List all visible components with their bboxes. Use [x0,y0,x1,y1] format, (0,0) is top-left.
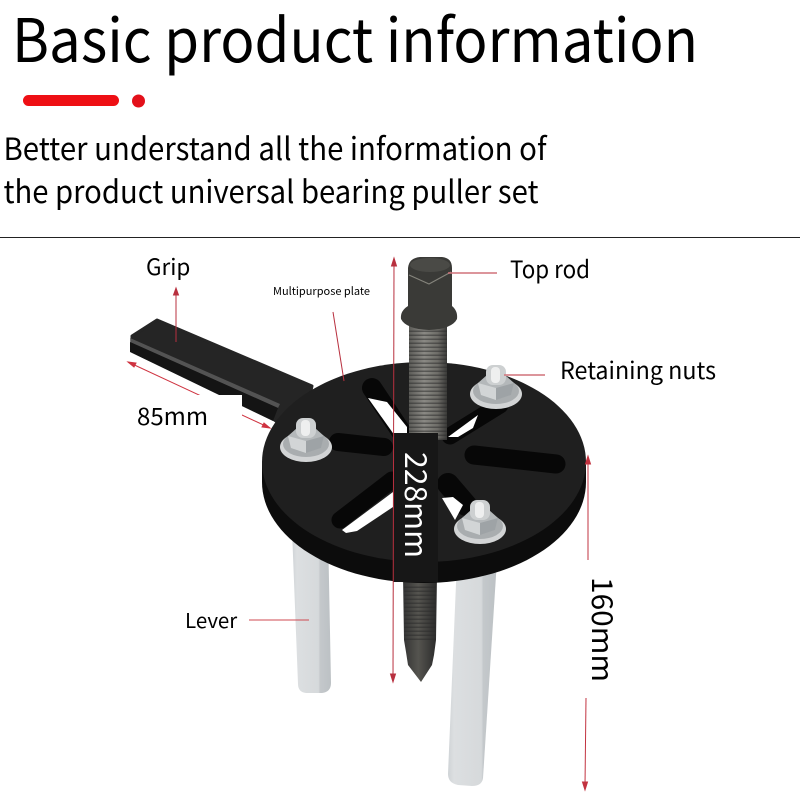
leader: retaining nuts [504,374,545,376]
label: Retaining nuts: Retaining nuts [560,351,716,386]
divider [0,237,800,238]
label: 160mm: 160mm [583,577,625,682]
white patch behind 85mm [136,395,242,435]
plate slots [338,388,556,533]
top rod [401,257,457,440]
label: Lever: Lever [185,604,237,634]
dimension: grip arrow [174,288,178,342]
dimension: 85mm arrow [128,362,270,428]
grip handle [130,320,312,438]
label: 85mm: 85mm [137,397,208,432]
label: Multipurpose plate: Multipurpose plate [273,283,370,299]
dimension: 228mm arrow [390,258,396,682]
subtitle [4,124,548,212]
lever legs [292,530,497,786]
retaining nuts [280,365,522,544]
subtitle: the product universal bearing puller set [4,167,539,212]
label: Grip: Grip [146,250,190,282]
plate leader line [333,312,344,381]
leader: top rod [448,272,497,274]
label: 228mm: 228mm [396,452,440,558]
label: Top rod: Top rod [510,250,590,285]
round plate [262,362,586,583]
black label block behind 228mm [393,433,438,582]
dimension: 160mm arrow [582,456,590,790]
product photo: universal bearing puller [130,257,586,786]
subtitle: Better understand all the information of [4,124,548,169]
leader: lever [249,619,309,621]
red accent bar and dot [23,94,145,108]
lower rod tip [403,575,437,682]
